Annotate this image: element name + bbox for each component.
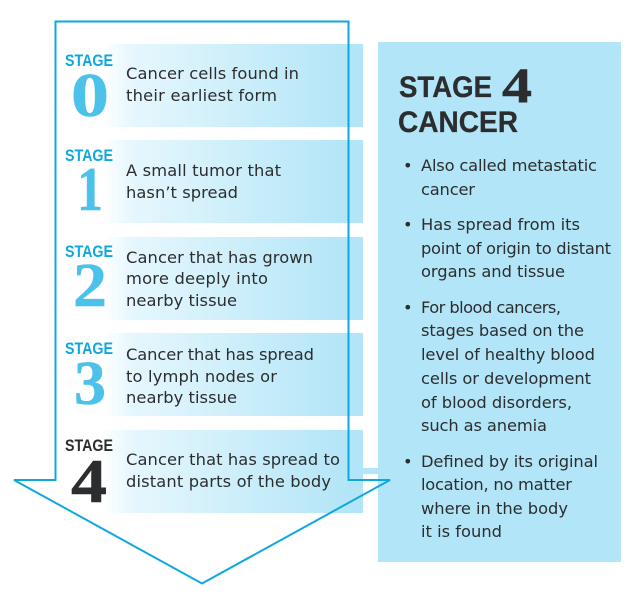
bullet: also called metastatic (403, 156, 597, 199)
bullet: blood cancers: level of healthy blood (421, 345, 595, 364)
stage 4 numeral: 4 (71, 448, 107, 516)
bullet: blood cancers: such as anemia (421, 416, 547, 435)
stage 3 numeral: 3 (74, 350, 106, 418)
stage 2 description: nearby tissue (126, 291, 237, 310)
heading (398, 57, 532, 139)
stage 0 label: STAGE (65, 52, 113, 70)
stage 0 numeral: 0 (71, 62, 109, 130)
bullet: defined by origin: • (403, 452, 413, 471)
arrow outline (14, 22, 390, 584)
bullet: blood cancers: of blood disorders, (421, 393, 572, 412)
bullet: blood cancers: cells or development (421, 369, 591, 388)
stage 1 label: STAGE (65, 147, 113, 165)
bullet: has spread: • (403, 215, 413, 234)
bullet: has spread (403, 215, 611, 281)
panel: stage 1 (65, 140, 363, 224)
stage 2 description (126, 248, 313, 310)
panel: stage 0 (65, 44, 363, 130)
bullet: blood cancers: For blood cancers, (421, 298, 561, 317)
heading: 4 (502, 57, 532, 113)
bullet: has spread: Has spread from its (421, 215, 580, 234)
bullet: defined by origin: location, no matter (421, 475, 572, 494)
stage 1 description: A small tumor that (126, 161, 281, 180)
stage 0 description: their earliest form (126, 86, 277, 105)
panel: stage 4 cancer (378, 42, 621, 562)
bullet: defined by origin: Defined by its original (421, 452, 598, 471)
stage 3 description: nearby tissue (126, 388, 237, 407)
bullet: has spread: point of origin to distant (421, 239, 611, 258)
bullet: defined by origin: it is found (421, 522, 502, 541)
panel: stage 3 (65, 333, 363, 418)
bullet: blood cancers: stages based on the (421, 321, 584, 340)
stage 2 numeral: 2 (73, 252, 107, 320)
heading: CANCER (398, 106, 518, 139)
panel: stage 2 (65, 237, 363, 320)
stage 2 description: more deeply into (126, 269, 268, 288)
stage 1 description: hasn’t spread (126, 183, 238, 202)
stage 4 description: Cancer that has spread to (126, 450, 340, 469)
bullet: defined by origin (403, 452, 598, 541)
bullet: blood cancers: • (403, 298, 413, 317)
stage 4 description (126, 450, 340, 491)
stage 0 description (126, 64, 299, 105)
bullet: also called metastatic: • (403, 156, 413, 175)
stage 4 description: distant parts of the body (126, 472, 331, 491)
stage 3 description: Cancer that has spread (126, 345, 314, 364)
stage 1 numeral: 1 (77, 156, 103, 224)
bullet: also called metastatic: Also called metastatic (421, 156, 597, 175)
bullet: has spread: organs and tissue (421, 262, 565, 281)
connector: stage 4 to panel (362, 468, 379, 474)
stage 1 description (126, 161, 281, 202)
bullet: defined by origin: where in the body (421, 499, 568, 518)
stage 2 label: STAGE (65, 243, 113, 261)
stage 3 label: STAGE (65, 340, 113, 358)
stage 3 description (126, 345, 314, 407)
stage 2 description: Cancer that has grown (126, 248, 313, 267)
stage 4 label: STAGE (65, 437, 113, 455)
stage 0 description: Cancer cells found in (126, 64, 299, 83)
heading: STAGE (399, 71, 492, 104)
stage 3 description: to lymph nodes or (126, 367, 277, 386)
bullet: blood cancers (403, 298, 595, 435)
bullet: also called metastatic: cancer (421, 180, 475, 199)
panel: stage 4 (65, 430, 363, 516)
